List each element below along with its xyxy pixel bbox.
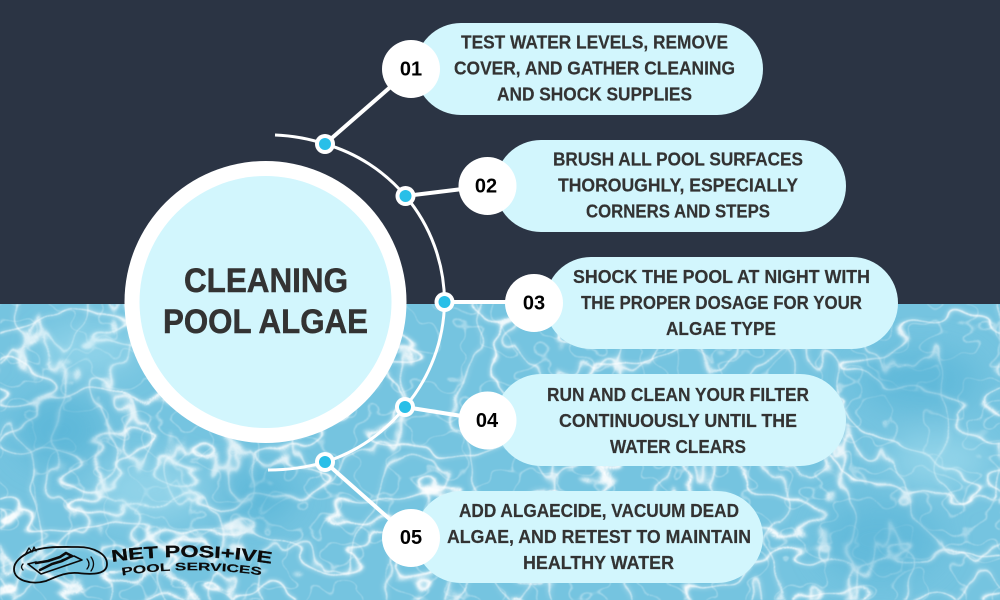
connector arc with branch lines xyxy=(268,69,534,538)
icon: pool with float xyxy=(14,547,107,582)
central circle xyxy=(124,161,406,443)
step 04: CONTINUOUSLY UNTIL THE xyxy=(559,411,797,431)
dark upper background xyxy=(0,0,1000,304)
step 04: 04 xyxy=(476,410,499,432)
step 04 xyxy=(458,374,846,466)
step 02 xyxy=(458,140,846,232)
step 04: WATER CLEARS xyxy=(610,437,746,457)
timeline nodes xyxy=(315,134,454,472)
step 03: SHOCK THE POOL AT NIGHT WITH xyxy=(573,267,870,287)
step 03: ALGAE TYPE xyxy=(666,319,776,339)
step 01 xyxy=(382,23,763,115)
step 02: THOROUGHLY, ESPECIALLY xyxy=(558,176,798,196)
step 05: HEALTHY WATER xyxy=(523,553,674,573)
step 05: 05 xyxy=(400,527,422,549)
step 01: AND SHOCK SUPPLIES xyxy=(497,84,692,104)
step 01: 01 xyxy=(400,58,422,80)
step 01: TEST WATER LEVELS, REMOVE xyxy=(461,32,728,52)
title: POOL ALGAE xyxy=(163,303,368,341)
logo tagline: POOL SERVICES xyxy=(122,562,262,576)
step 03: THE PROPER DOSAGE FOR YOUR xyxy=(581,293,862,313)
step 05 xyxy=(382,491,763,583)
step 01: COVER, AND GATHER CLEANING xyxy=(454,58,735,78)
step 03: 03 xyxy=(523,292,545,314)
step 05: ADD ALGAECIDE, VACUUM DEAD xyxy=(459,501,739,521)
step 02: CORNERS AND STEPS xyxy=(586,202,770,222)
logo: Net Positive Pool Services xyxy=(13,545,272,584)
step 05: ALGAE, AND RETEST TO MAINTAIN xyxy=(447,527,751,547)
step 04: RUN AND CLEAN YOUR FILTER xyxy=(547,385,809,405)
step 02: BRUSH ALL POOL SURFACES xyxy=(553,150,803,170)
title xyxy=(163,262,368,341)
water background xyxy=(0,304,1000,600)
step 03 xyxy=(505,257,898,349)
step 02: 02 xyxy=(475,176,497,198)
title: CLEANING xyxy=(184,262,348,300)
logo name: NET POSI+IVE xyxy=(112,545,272,564)
